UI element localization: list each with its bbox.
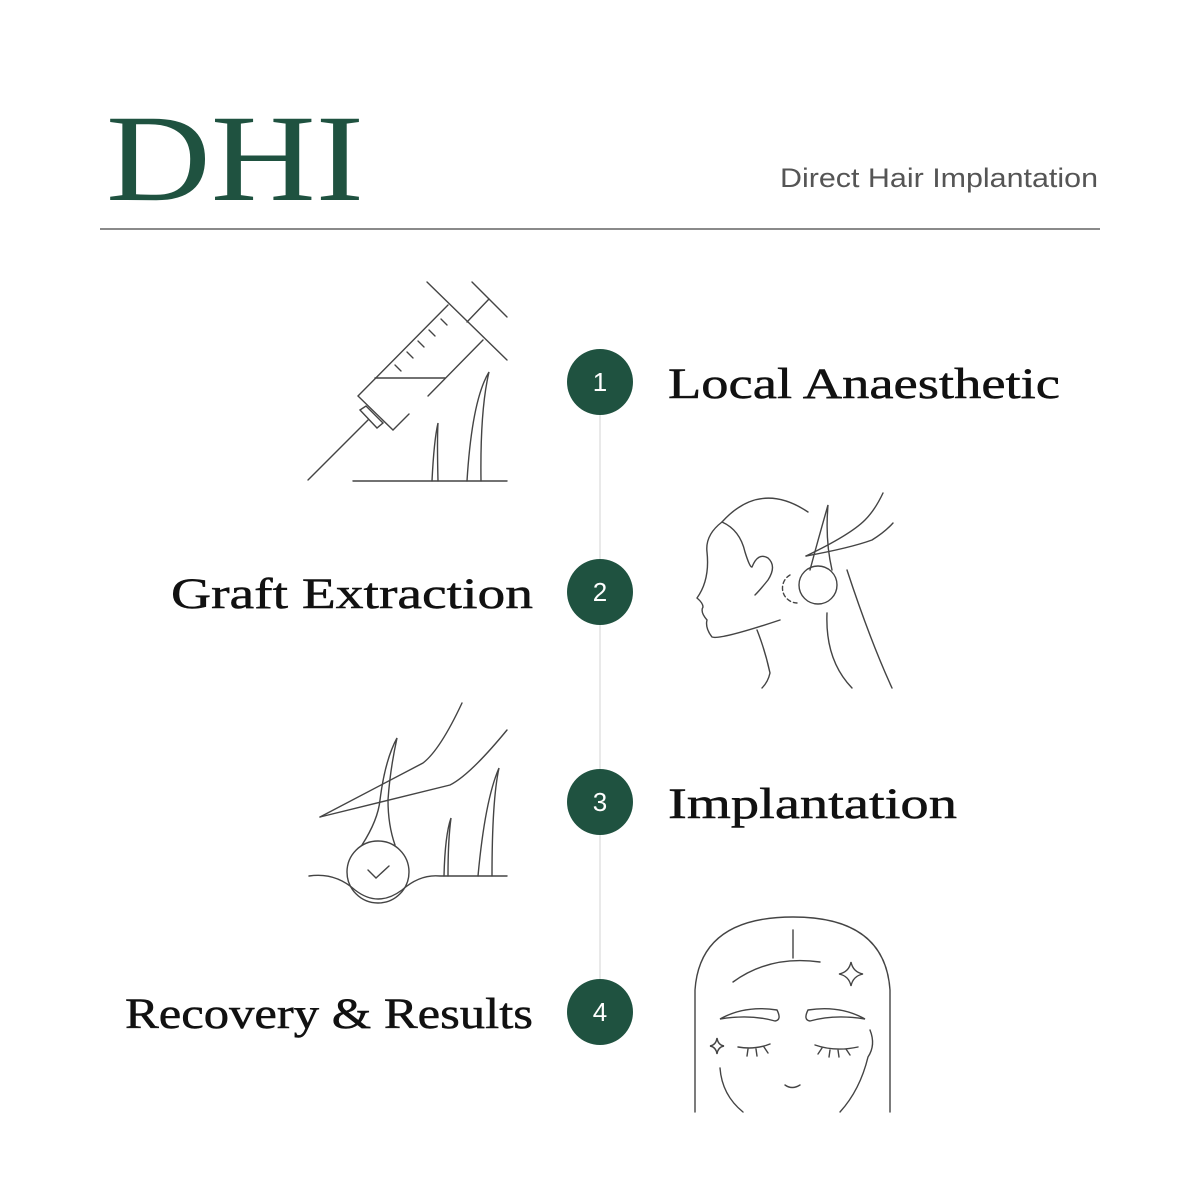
step 1 — [567, 349, 1060, 415]
step 2 — [171, 559, 633, 625]
step 1: Local Anaesthetic — [668, 361, 1060, 408]
icon: head profile extraction — [697, 493, 893, 688]
step 2: Graft Extraction — [171, 571, 533, 618]
subtitle: Direct Hair Implantation — [780, 163, 1098, 193]
icon: result face — [695, 917, 890, 1112]
icon: implantation — [309, 703, 507, 903]
step 2: 2 — [593, 577, 607, 607]
step 4 — [125, 979, 633, 1045]
step 3: Implantation — [668, 781, 957, 828]
step 3 — [567, 769, 957, 835]
title: DHI — [106, 90, 364, 227]
step 3: 3 — [593, 787, 607, 817]
step 1: 1 — [593, 367, 607, 397]
step 4: Recovery & Results — [125, 991, 533, 1038]
step 4: 4 — [593, 997, 607, 1027]
icon: syringe — [308, 282, 507, 481]
